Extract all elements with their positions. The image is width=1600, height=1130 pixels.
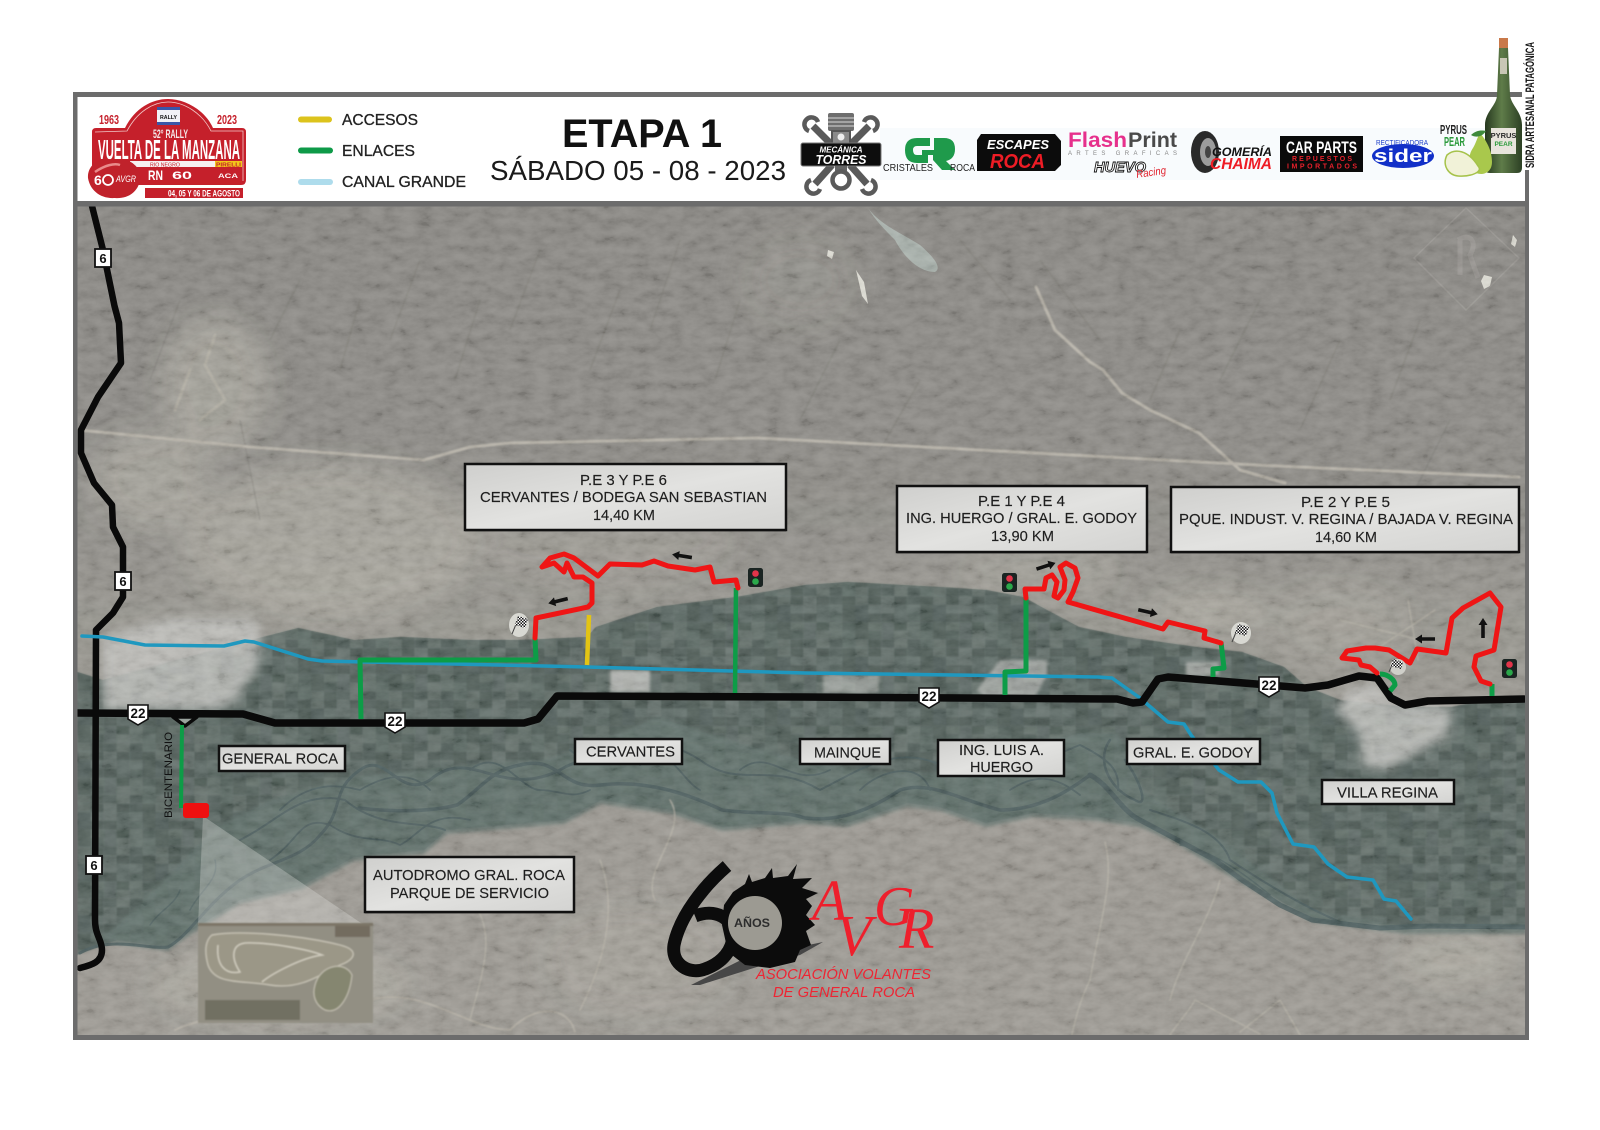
icon: route 22 shield: 22 xyxy=(922,689,936,704)
logo: Pyrus Pear: PYRUS xyxy=(1440,122,1467,137)
icon: finish flag P.E 2 xyxy=(1389,659,1406,675)
logo: FlashPrint and Huevo Racing: ARTES GRAFICAS xyxy=(1068,151,1177,157)
logo: Rectificadora Sider xyxy=(1372,140,1434,168)
logo: Rectificadora Sider: RECTIFICADORA xyxy=(1376,140,1428,147)
callout: Autodromo: PARQUE DE SERVICIO xyxy=(390,885,549,902)
text: VUELTA DE LA MANZANA xyxy=(98,134,240,165)
logo: AVGR 60 años: G xyxy=(874,876,914,938)
especial stage: red route P.E 3 / P.E 6 xyxy=(535,554,738,638)
logo: Cristales Roca: ROCA xyxy=(950,163,975,174)
small pale patches xyxy=(610,660,1219,697)
logo: Rally Vuelta de la Manzana: RALLY xyxy=(160,115,178,121)
overpass mark xyxy=(173,717,197,726)
logo: AVGR 60 años: ASOCIACIÓN VOLANTES xyxy=(755,966,931,983)
logo: Escapes Roca: ESCAPES xyxy=(987,137,1049,152)
town label: Mainque: MAINQUE xyxy=(814,744,881,762)
icon: route 22 shield xyxy=(128,705,148,725)
logo: Gomería Chaima: GOMERÍA xyxy=(1212,144,1272,159)
logo: FlashPrint and Huevo Racing: HUEVO xyxy=(1094,159,1146,176)
icon: direction arrow xyxy=(1478,618,1488,638)
town label: Villa Regina xyxy=(1322,780,1454,804)
urban patches xyxy=(103,618,1452,770)
icon: traffic light start P.E 1 xyxy=(1002,573,1017,592)
route: highway 22 xyxy=(77,676,1524,723)
logo: Rally Vuelta de la Manzana: 6 xyxy=(94,172,102,188)
desert ridge streaks xyxy=(240,420,260,520)
especial stage: red route P.E 1 / P.E 4 xyxy=(1025,563,1221,643)
town label: Gral. E. Godoy: GRAL. E. GODOY xyxy=(1133,744,1253,762)
parque de servicio marker xyxy=(183,803,209,818)
watermark diamond xyxy=(1414,208,1519,310)
logo: FlashPrint and Huevo Racing xyxy=(1068,129,1177,181)
town label: Mainque xyxy=(800,739,890,764)
street label: Bicentenario: BICENTENARIO xyxy=(163,732,175,818)
logo: Rally Vuelta de la Manzana: RIO NEGRO xyxy=(150,162,181,168)
icon: direction arrow xyxy=(1415,634,1435,644)
callout: P.E 2 y P.E 5: PQUE. INDUST. V. REGINA / BAJADA V. REGINA xyxy=(1179,511,1513,528)
river floodplain xyxy=(100,717,1526,951)
legend: canal grande: CANAL GRANDE xyxy=(342,174,466,191)
town label: General Roca xyxy=(219,746,345,771)
logo: Rally Vuelta de la Manzana: 1963 xyxy=(99,112,119,127)
callout: P.E 1 y P.E 4: ING. HUERGO / GRAL. E. GODOY xyxy=(906,510,1137,527)
icon: traffic light start P.E 2 xyxy=(1502,659,1517,678)
town label: Villa Regina: VILLA REGINA xyxy=(1337,784,1438,802)
logo: FlashPrint and Huevo Racing: Racing xyxy=(1135,165,1168,181)
especial stage: red route P.E 2 / P.E 5 xyxy=(1342,593,1501,684)
icon: route 6 shield xyxy=(95,249,111,267)
callout: P.E 2 y P.E 5: P.E 2 Y P.E 5 xyxy=(1301,494,1390,511)
callout: P.E 2 y P.E 5 xyxy=(1171,487,1519,552)
canal grande xyxy=(82,636,1411,919)
panel: header background xyxy=(77,97,1526,201)
logo: Car Parts: IMPORTADOS xyxy=(1287,164,1357,170)
logo: Pyrus Pear xyxy=(1440,38,1522,176)
town label: Cervantes: CERVANTES xyxy=(586,744,675,760)
callout: P.E 2 y P.E 5: 14,60 KM xyxy=(1315,529,1377,546)
logo: Mecánica Torres: MECÁNICA xyxy=(819,146,863,154)
title: Etapa 1: ETAPA 1 xyxy=(562,112,722,156)
logo: Cristales Roca: CRISTALES xyxy=(883,163,933,174)
sponsor strip xyxy=(880,128,1490,180)
callout: P.E 3 y P.E 6: 14,40 KM xyxy=(593,507,655,524)
town label: General Roca: GENERAL ROCA xyxy=(222,750,338,768)
icon: route 22 shield: 22 xyxy=(130,706,146,721)
callout: P.E 3 y P.E 6: P.E 3 Y P.E 6 xyxy=(580,472,667,489)
icon: route 6 shield xyxy=(115,572,131,590)
logo: Rectificadora Sider: sider xyxy=(1374,146,1432,166)
panel: satellite map xyxy=(77,206,1526,1036)
accesos: yellow link xyxy=(587,615,589,665)
logo: Rally Vuelta de la Manzana: AVGR xyxy=(115,174,136,184)
desert features: pond and specks xyxy=(827,208,1517,304)
logo: Pyrus Pear: PEAR xyxy=(1494,141,1513,148)
route: highway 6 xyxy=(80,206,123,968)
town label: Gral. E. Godoy xyxy=(1127,739,1260,764)
logo: Rally Vuelta de la Manzana: 04, 05 Y 06 DE AGOSTO xyxy=(168,188,240,200)
logo: Car Parts: CAR PARTS xyxy=(1286,138,1357,157)
logo: Cristales Roca xyxy=(883,138,975,174)
river channels xyxy=(80,740,1526,953)
logo: FlashPrint and Huevo Racing: Print xyxy=(1128,129,1177,152)
map frame xyxy=(73,92,1529,1040)
icon: direction arrow xyxy=(1137,605,1159,619)
icon: finish flag P.E 3 xyxy=(509,613,529,637)
town label: Cervantes xyxy=(575,739,682,764)
callout: P.E 1 y P.E 4: 13,90 KM xyxy=(991,528,1054,545)
logo: Gomería Chaima xyxy=(1191,131,1272,173)
farmland tone overlay xyxy=(77,582,1526,955)
icon: route 6 shield: 6 xyxy=(119,574,127,589)
town label: Ing. Luis A. Huergo: ING. LUIS A. xyxy=(959,742,1044,759)
callout: P.E 1 y P.E 4 xyxy=(897,486,1147,552)
callout: P.E 3 y P.E 6: CERVANTES / BODEGA SAN SEBASTIAN xyxy=(480,489,767,506)
icon: route 22 shield: 22 xyxy=(1262,678,1276,693)
legend xyxy=(298,112,466,191)
icon: direction arrow xyxy=(1035,559,1057,573)
callout: Autodromo xyxy=(365,857,574,912)
logo: AVGR 60 años: A xyxy=(808,868,848,933)
legend: accesos xyxy=(298,112,418,129)
logo: AVGR 60 años: AÑOS xyxy=(734,915,770,930)
pale tracks across desert xyxy=(79,287,1519,1035)
icon: finish flag P.E 1 xyxy=(1231,622,1251,644)
texture overlay xyxy=(77,206,1526,1036)
callout: P.E 3 y P.E 6 xyxy=(465,464,786,530)
icon: traffic light start P.E 3 xyxy=(748,568,763,587)
legend: enlaces: ENLACES xyxy=(342,143,415,160)
logo: AVGR 60 años: R xyxy=(898,896,934,961)
logo: Pyrus Pear: PYRUS xyxy=(1491,131,1516,140)
icon: route 22 shield xyxy=(1259,677,1279,697)
logo: AVGR 60 años xyxy=(674,864,934,1001)
enlaces: green links xyxy=(181,588,1492,808)
logo: Rally Vuelta de la Manzana: PIRELLI xyxy=(216,162,242,168)
subtitle: date: SÁBADO 05 - 08 - 2023 xyxy=(490,155,786,186)
icon: route 22 shield: 22 xyxy=(388,714,402,729)
logo: Pyrus Pear: PEAR xyxy=(1444,134,1465,149)
icon: route 22 shield xyxy=(385,713,405,733)
logo: FlashPrint and Huevo Racing: Flash xyxy=(1068,129,1127,152)
logo: Escapes Roca: ROCA xyxy=(990,151,1045,173)
callout: P.E 1 y P.E 4: P.E 1 Y P.E 4 xyxy=(978,493,1065,510)
logo: Rally Vuelta de la Manzana xyxy=(88,99,246,200)
farmland band xyxy=(77,582,1526,955)
logo: Car Parts xyxy=(1280,136,1363,172)
translucent wedge to autodrome xyxy=(198,816,364,925)
autodrome inset photo xyxy=(198,923,373,1023)
logo: Escapes Roca xyxy=(977,134,1061,173)
logo: Mecánica Torres xyxy=(801,113,881,194)
logo: AVGR 60 años: DE GENERAL ROCA xyxy=(773,984,915,1001)
logo: Rally Vuelta de la Manzana: 2023 xyxy=(217,112,237,127)
logo: Rally Vuelta de la Manzana: ACA xyxy=(218,174,239,180)
icon: route 6 shield: 6 xyxy=(90,858,98,873)
icon: direction arrow xyxy=(671,550,693,562)
icon: route 22 shield xyxy=(919,688,939,708)
legend: accesos: ACCESOS xyxy=(342,112,418,129)
logo: Gomería Chaima: CHAIMA xyxy=(1210,156,1272,173)
icon: direction arrow xyxy=(547,594,569,608)
logo: Mecánica Torres: TORRES xyxy=(816,152,867,167)
logo: Rally Vuelta de la Manzana: RN xyxy=(148,167,163,183)
legend: enlaces xyxy=(298,143,415,160)
logo: Rally Vuelta de la Manzana: 60 xyxy=(172,170,192,182)
logo: AVGR 60 años: V xyxy=(836,903,878,968)
icon: route 6 shield xyxy=(86,856,102,874)
callout: Autodromo: AUTODROMO GRAL. ROCA xyxy=(373,867,565,884)
icon: route 6 shield: 6 xyxy=(99,251,107,266)
town label: Ing. Luis A. Huergo xyxy=(938,740,1064,776)
town label: Ing. Luis A. Huergo: HUERGO xyxy=(970,759,1033,776)
logo: Rally Vuelta de la Manzana: 52° RALLY xyxy=(153,127,188,141)
logo: Car Parts: REPUESTOS xyxy=(1292,156,1352,163)
